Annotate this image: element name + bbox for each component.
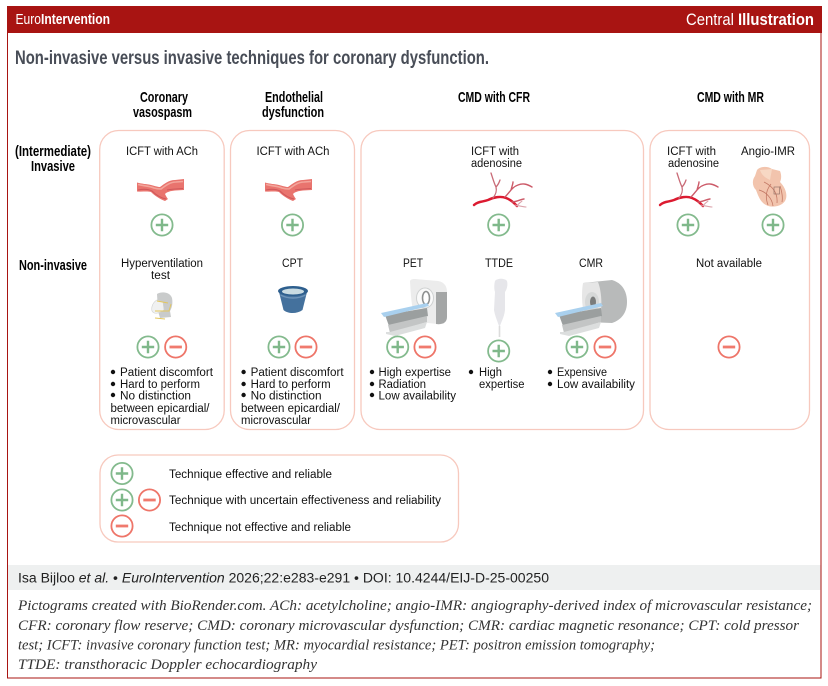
journal name: EuroIntervention bbox=[16, 11, 110, 28]
panel: coronary vasospasm: ICFT with ACh bbox=[126, 146, 198, 158]
panel: CMD with MR bbox=[650, 130, 810, 430]
rating: effective bbox=[151, 214, 173, 236]
CMR column: CMR bbox=[579, 258, 603, 270]
panel: CMD with CFR bbox=[361, 130, 644, 430]
legend: uncertain: Technique with uncertain effectiveness and reliability bbox=[169, 495, 441, 507]
limitations list: Hard to perform bbox=[251, 379, 331, 391]
limitations list bbox=[110, 367, 214, 427]
PET column: Radiation bbox=[378, 379, 426, 391]
panel: endothelial dysfunction bbox=[230, 130, 354, 430]
panel: endothelial dysfunction: ICFT with ACh bbox=[256, 146, 330, 158]
limitations list: microvascular bbox=[110, 415, 181, 427]
TTDE column: TTDE bbox=[485, 258, 513, 270]
TTDE column bbox=[469, 258, 524, 391]
rating: uncertain bbox=[566, 336, 616, 358]
icon: artery bbox=[265, 179, 312, 201]
title: Non-invasive versus invasive techniques for coronary dysfunction. bbox=[15, 48, 489, 69]
limitations list: microvascular bbox=[241, 415, 311, 427]
panel: CMD with MR: adenosine bbox=[668, 158, 719, 170]
column headings: CMD with CFR bbox=[458, 89, 530, 106]
PET column bbox=[370, 258, 456, 402]
rating: uncertain bbox=[137, 336, 186, 358]
column headings: CMD with MR bbox=[697, 89, 764, 106]
icon: microvessels bbox=[474, 173, 532, 207]
panel: CMD with CFR: ICFT with bbox=[471, 146, 519, 158]
icon: MRI scanner bbox=[555, 280, 627, 336]
column headings: Endothelial bbox=[265, 89, 323, 106]
non-invasive label: Not available bbox=[696, 258, 762, 270]
rating: effective (angio-IMR) bbox=[762, 214, 784, 236]
limitations list: between epicardial/ bbox=[110, 403, 210, 415]
column headings: vasospasm bbox=[133, 104, 192, 121]
legend: not effective: Technique not effective and reliable bbox=[169, 522, 351, 534]
panel: coronary vasospasm: test bbox=[151, 270, 171, 282]
column headings bbox=[133, 89, 764, 121]
rating: uncertain bbox=[387, 336, 436, 358]
legend bbox=[100, 455, 458, 542]
rating: effective (ICFT) bbox=[677, 214, 699, 236]
panel: CMD with CFR: adenosine bbox=[471, 158, 522, 170]
icon: ice bucket bbox=[278, 286, 308, 313]
row labels: Non-invasive bbox=[19, 257, 87, 274]
column headings: Coronary bbox=[140, 89, 188, 106]
panel: CMD with MR: ICFT with bbox=[667, 146, 716, 158]
panel: CMD with MR: Angio-IMR bbox=[741, 146, 795, 158]
CMR column: Expensive bbox=[557, 367, 607, 379]
abbreviations footnote: Pictograms created with BioRender.com. ACh: acetylcholine; angio-IMR: angiography-derived index of microvascular resistance; bbox=[17, 598, 812, 614]
panel: coronary vasospasm bbox=[100, 130, 224, 430]
abbreviations footnote: test; ICFT: invasive coronary function test; MR: myocardial resistance; PET: positron emission tomography; bbox=[18, 638, 655, 654]
abbreviations footnote bbox=[17, 598, 812, 673]
column headings: dysfunction bbox=[262, 104, 324, 121]
citation band bbox=[8, 565, 820, 590]
row labels: (Intermediate) bbox=[15, 143, 91, 160]
legend: uncertain bbox=[111, 489, 441, 511]
row labels bbox=[15, 143, 91, 274]
legend: effective: Technique effective and reliable bbox=[169, 469, 332, 481]
abbreviations footnote: CFR: coronary flow reserve; CMD: coronary microvascular dysfunction; CMR: cardiac magnetic resonance; CPT: cold pressor bbox=[18, 618, 799, 634]
legend: effective bbox=[111, 463, 332, 484]
PET column: PET bbox=[403, 258, 423, 270]
PET column: High expertise bbox=[378, 367, 451, 379]
limitations list: between epicardial/ bbox=[241, 403, 341, 415]
rating: effective bbox=[282, 214, 303, 236]
legend: not effective bbox=[111, 515, 351, 537]
PET column: Low availability bbox=[378, 390, 456, 402]
non-invasive technique name: Hyperventilation bbox=[121, 258, 203, 270]
icon: head with mask bbox=[152, 292, 172, 319]
rating: uncertain bbox=[268, 336, 317, 358]
limitations list: Patient discomfort bbox=[251, 367, 344, 379]
TTDE column: High bbox=[479, 367, 502, 379]
icon: artery bbox=[137, 179, 184, 201]
limitations list: No distinction bbox=[120, 390, 191, 402]
header bar bbox=[7, 6, 822, 33]
CMR column bbox=[548, 258, 635, 391]
CMR column: Low availability bbox=[557, 379, 635, 391]
row labels: Invasive bbox=[31, 158, 75, 175]
citation band: Isa Bijloo et al. • EuroIntervention 2026;22:e283-e291 • DOI: 10.4244/EIJ-D-25-00250 bbox=[18, 570, 549, 586]
abbreviations footnote: TTDE: transthoracic Doppler echocardiography bbox=[18, 657, 317, 673]
limitations list bbox=[241, 367, 344, 427]
icon: ultrasound probe bbox=[494, 279, 507, 337]
TTDE column: expertise bbox=[479, 379, 524, 391]
icon: heart bbox=[753, 167, 786, 207]
rating: effective bbox=[488, 340, 509, 362]
limitations list: Patient discomfort bbox=[120, 367, 214, 379]
limitations list: No distinction bbox=[251, 390, 322, 402]
limitations list: Hard to perform bbox=[120, 379, 200, 391]
rating: not effective bbox=[718, 336, 740, 358]
non-invasive technique name: CPT bbox=[282, 258, 303, 270]
icon: PET scanner bbox=[381, 279, 447, 336]
rating: effective bbox=[488, 214, 509, 236]
central illustration label: Central Illustration bbox=[686, 10, 814, 29]
icon: microvessels bbox=[660, 173, 718, 207]
